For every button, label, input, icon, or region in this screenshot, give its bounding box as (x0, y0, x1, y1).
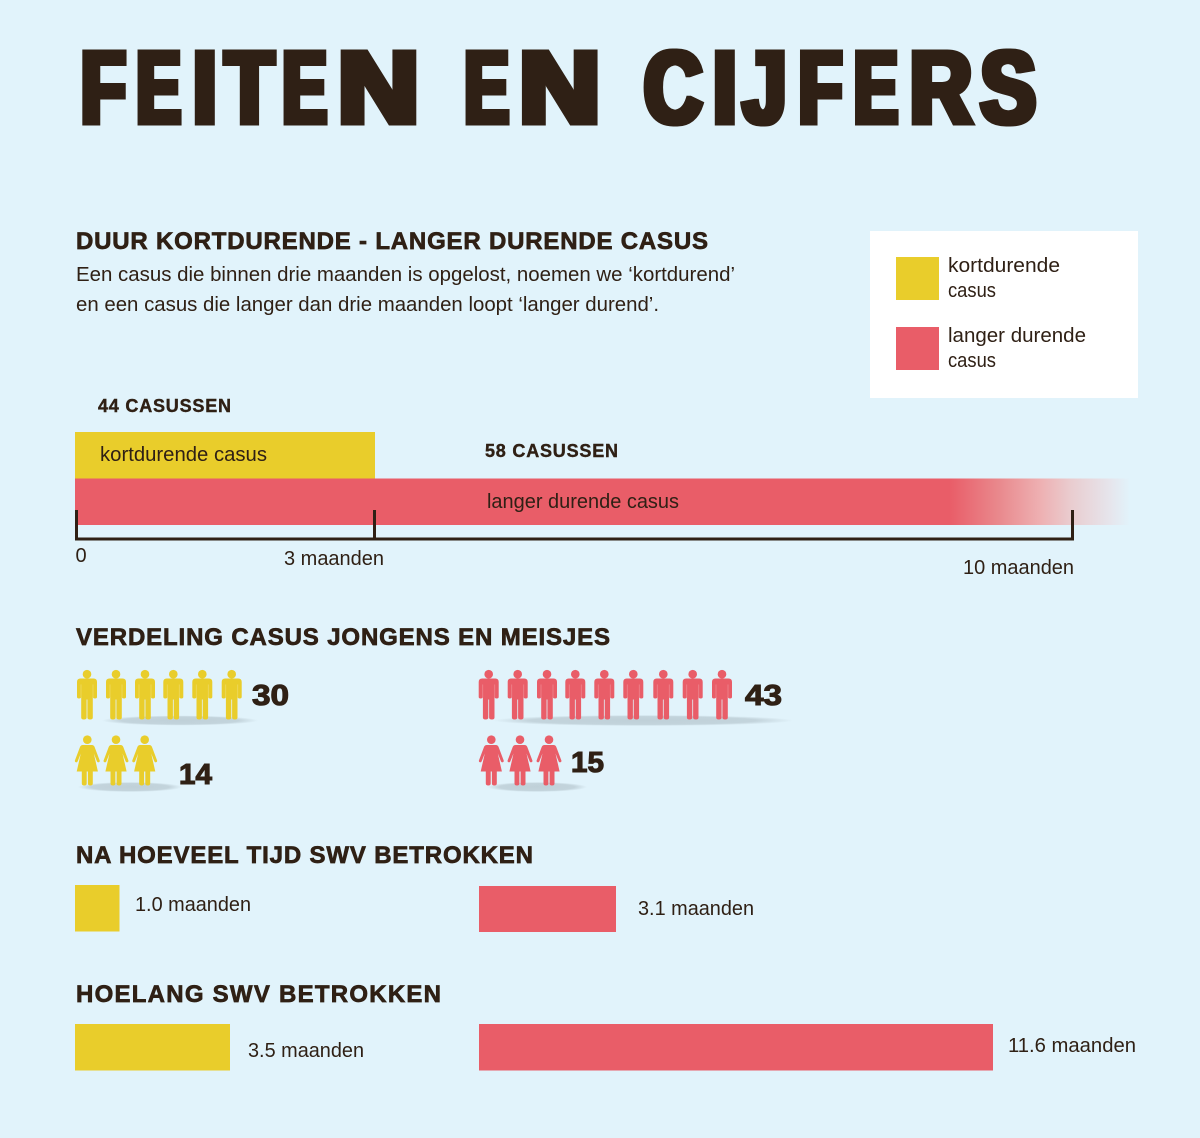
title: N (338, 30, 419, 145)
title: E (283, 30, 326, 145)
title: F (81, 30, 126, 145)
legend: longer cases: casus (948, 350, 996, 372)
heading: time until involvement: NA HOEVEEL TIJD SWV BETROKKEN (76, 842, 533, 869)
title: J (743, 30, 786, 145)
heading: duration of involvement: HOELANG SWV BETROKKEN (76, 981, 441, 1008)
axis label: 0: 0 (76, 545, 87, 567)
title: E (137, 30, 180, 145)
bar: short cases: kortdurende casus (100, 444, 267, 466)
pictogram: yellow girls 14 (75, 735, 212, 792)
label: 44 cases: 44 CASUSSEN (98, 396, 231, 416)
bar: 3.1 months: 3.1 maanden (638, 898, 754, 920)
intro text: en een casus die langer dan drie maanden loopt ‘langer durend’. (76, 294, 659, 316)
pictogram: yellow boys 30 (77, 670, 289, 726)
pictogram: yellow boys 30: 30 (252, 680, 289, 712)
pictogram: red boys 43 (479, 670, 793, 726)
pictogram: red girls 15: 15 (571, 747, 604, 779)
title: E (465, 30, 509, 145)
legend: short cases: kortdurende (948, 255, 1060, 277)
bar: 3.5 months: 3.5 maanden (248, 1040, 364, 1062)
heading: duration: DUUR KORTDURENDE - LANGER DURENDE CASUS (76, 228, 708, 255)
bar: 11.6 months (479, 1024, 1136, 1070)
time axis (76, 510, 1072, 539)
title: T (225, 30, 274, 145)
title: I (193, 30, 216, 145)
bar: 1.0 months (75, 885, 251, 932)
timeline chart (75, 396, 1130, 579)
title: F (799, 30, 842, 145)
bar: short cases (75, 432, 375, 478)
title: R (910, 30, 972, 145)
title: C (644, 30, 702, 145)
legend: longer cases: langer durende (948, 325, 1086, 347)
intro text: Een casus die binnen drie maanden is opgelost, noemen we ‘kortdurend’ (76, 264, 735, 286)
bar: longer cases: langer durende casus (487, 491, 679, 513)
legend: short cases (896, 255, 1060, 302)
title: N (519, 30, 600, 145)
bar: 3.5 months (75, 1024, 364, 1070)
pictogram: yellow girls 14: 14 (179, 759, 212, 791)
bar: longer cases (75, 478, 1130, 525)
intro text (76, 264, 735, 316)
title: S (981, 30, 1036, 145)
pictogram: red boys 43: 43 (745, 680, 782, 712)
title: I (713, 30, 736, 145)
axis label: 10 months: 10 maanden (963, 557, 1074, 579)
bar: 1.0 months: 1.0 maanden (135, 894, 251, 916)
bar: 11.6 months: 11.6 maanden (1008, 1035, 1136, 1057)
legend: short cases: casus (948, 280, 996, 302)
legend: longer cases (896, 325, 1086, 372)
title: E (854, 30, 898, 145)
legend (870, 231, 1138, 398)
section: duration of cases (76, 228, 735, 316)
label: 58 cases: 58 CASUSSEN (485, 441, 618, 461)
heading: distribution: VERDELING CASUS JONGENS EN MEISJES (76, 624, 610, 651)
pictogram: red girls 15 (479, 735, 604, 792)
bar: 3.1 months (479, 886, 754, 932)
axis label: 3 months: 3 maanden (284, 548, 384, 570)
